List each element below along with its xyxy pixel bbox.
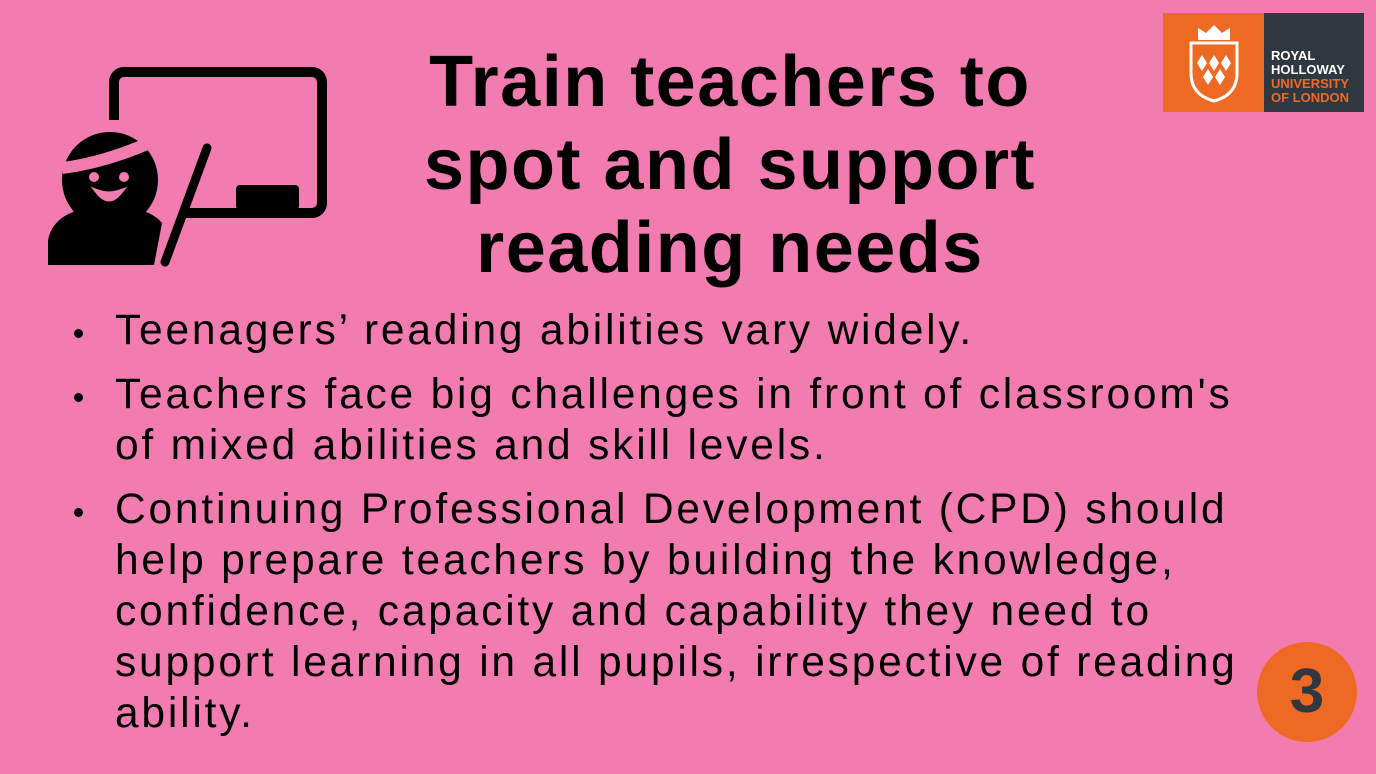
bullet list: Teachers face big challenges in front of classroom's: [115, 371, 1233, 418]
icon: teacher at whiteboard: [48, 67, 327, 266]
bullet list: help prepare teachers by building the knowledge,: [115, 537, 1176, 584]
bullet list: support learning in all pupils, irrespective of reading: [115, 639, 1238, 686]
logo: Royal Holloway: [1163, 13, 1364, 112]
title: reading needs: [476, 208, 984, 288]
bullet list: confidence, capacity and capability they need to: [115, 588, 1152, 635]
title: Train teachers to: [429, 42, 1031, 122]
bullet list: of mixed abilities and skill levels.: [115, 422, 828, 469]
icon: crest: [1190, 25, 1238, 102]
bullet list: Continuing Professional Development (CPD) should: [115, 486, 1227, 533]
badge: number 3: 3: [1290, 657, 1324, 726]
title: spot and support: [424, 125, 1036, 205]
bullet list: [74, 307, 1238, 737]
logo: Royal Holloway: UNIVERSITY: [1271, 76, 1349, 91]
badge: number 3: [1257, 642, 1357, 742]
bullet list: Teenagers’ reading abilities vary widely.: [115, 307, 974, 354]
title: [424, 42, 1036, 288]
logo: Royal Holloway: OF LONDON: [1271, 90, 1349, 105]
logo: Royal Holloway: HOLLOWAY: [1271, 62, 1345, 77]
bullet list: ability.: [115, 690, 255, 737]
logo: Royal Holloway: ROYAL: [1271, 48, 1315, 63]
